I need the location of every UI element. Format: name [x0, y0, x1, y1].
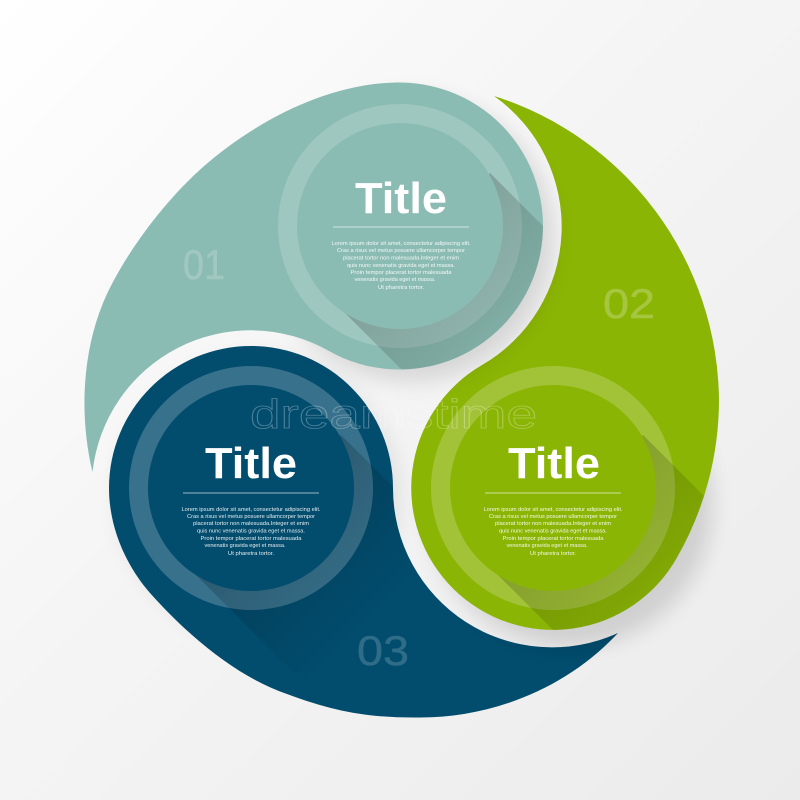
body text: placerat tortor non malesuada.Integer et enim	[343, 256, 459, 262]
number 01: 01	[183, 241, 225, 288]
body text: Cras a risus vel metus posuere ullamcorper tempor	[489, 514, 617, 520]
panel: 02 green segment	[411, 96, 719, 630]
panel: 03 navy segment	[109, 346, 618, 718]
title: Title	[508, 439, 600, 488]
navy swirl shape	[109, 346, 618, 718]
panel: 01 teal segment	[84, 82, 543, 472]
divider	[183, 492, 319, 494]
body text: Ut pharetra tortor.	[228, 551, 274, 557]
body text: placerat tortor non malesuada.Integer et enim	[193, 521, 309, 527]
inner circle	[297, 123, 503, 329]
body text: placerat tortor non malesuada.Integer et enim	[495, 521, 611, 527]
inner circle	[148, 385, 354, 591]
title: Title	[355, 174, 447, 223]
body text	[484, 507, 623, 557]
translucent ring	[129, 366, 373, 610]
body text: Proin tempor placerat tortor malesuada	[502, 536, 604, 542]
body text: Cras a risus vel metus posuere ullamcorper tempor	[337, 248, 465, 254]
body text: quis nunc venenatis gravida eget et massa.	[347, 263, 455, 269]
translucent ring	[431, 366, 675, 610]
number 03: 03	[357, 627, 409, 674]
body text	[182, 507, 321, 557]
translucent ring	[278, 104, 522, 348]
green swirl shape	[411, 96, 719, 630]
teal swirl shape	[84, 82, 543, 472]
title: Title	[205, 439, 297, 488]
body text	[332, 241, 471, 291]
body text: venenatis gravida eget et massa.	[506, 543, 588, 549]
body text: Lorem ipsum dolor sit amet, consectetur adipiscing elit.	[182, 507, 321, 513]
body text: quis nunc venenatis gravida eget et massa.	[499, 528, 607, 534]
divider	[333, 226, 469, 228]
navy soft shadow	[116, 354, 400, 638]
green soft shadow	[428, 363, 712, 647]
body text: quis nunc venenatis gravida eget et massa.	[197, 528, 305, 534]
long shadow	[196, 435, 394, 637]
watermark: dreamstime	[250, 391, 537, 437]
number 02: 02	[603, 280, 655, 327]
body text: Ut pharetra tortor.	[378, 285, 424, 291]
long shadow	[345, 173, 543, 370]
body text: Proin tempor placerat tortor malesuada	[350, 270, 452, 276]
inner circle	[450, 385, 656, 591]
body text: Ut pharetra tortor.	[530, 551, 576, 557]
body text: Proin tempor placerat tortor malesuada	[200, 536, 302, 542]
body text: Lorem ipsum dolor sit amet, consectetur adipiscing elit.	[484, 507, 623, 513]
long shadow	[498, 435, 704, 630]
body text: venenatis gravida eget et massa.	[354, 277, 436, 283]
teal soft shadow	[267, 95, 553, 381]
divider	[485, 492, 621, 494]
body text: Lorem ipsum dolor sit amet, consectetur adipiscing elit.	[332, 241, 471, 247]
body text: Cras a risus vel metus posuere ullamcorper tempor	[187, 514, 315, 520]
body text: venenatis gravida eget et massa.	[204, 543, 286, 549]
